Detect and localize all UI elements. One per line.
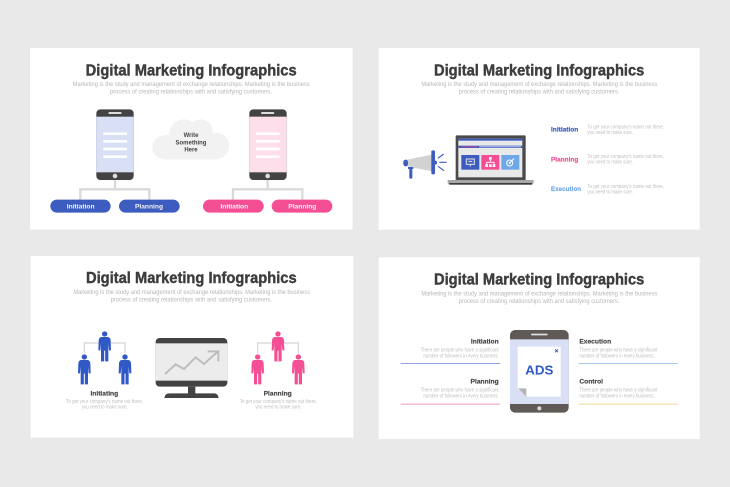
pill: pink planning: Planning — [288, 203, 316, 210]
icon: pink phone — [249, 109, 287, 180]
icon: blue team — [78, 331, 131, 384]
item: initiation — [551, 124, 664, 136]
title: Digital Marketing Infographics — [434, 62, 644, 79]
connector: blue team — [84, 343, 125, 353]
subtitle: Marketing is the study and management of exchange relationships. Marketing is the business — [421, 290, 658, 297]
subtitle: Marketing is the study and management of exchange relationships. Marketing is the business — [421, 81, 658, 88]
subtitle: process of creating relationships with and satisfying customers. — [111, 297, 272, 304]
connector: blue phone tree — [80, 180, 149, 200]
title: Digital Marketing Infographics — [434, 272, 644, 289]
subtitle: process of creating relationships with and satisfying customers. — [459, 298, 619, 305]
subtitle: Marketing is the study and management of exchange relationships. Marketing is the business — [73, 289, 311, 296]
text: initiating: To get your company's name out there, — [66, 399, 143, 405]
icon: presentation tile — [461, 155, 479, 170]
cloud callout: Here — [184, 148, 198, 154]
pill: blue planning: Planning — [135, 203, 163, 210]
panel: ads tablet — [379, 257, 700, 439]
icon: target tile — [501, 155, 519, 170]
cloud callout — [152, 119, 229, 159]
item: control — [579, 378, 678, 405]
item: initiation — [401, 339, 500, 364]
text: initiating: Initiating — [90, 390, 118, 397]
item: planning: number of followers in every business. — [423, 393, 499, 399]
item: planning — [551, 154, 664, 166]
pill: pink initiation: Initiation — [220, 203, 248, 210]
title: Digital Marketing Infographics — [86, 62, 297, 79]
icon: tablet with ads: ADS — [525, 363, 554, 378]
item: planning: you need to make sure. — [587, 160, 633, 166]
pill: pink initiation — [203, 200, 264, 213]
cloud callout: Write — [184, 133, 199, 139]
panel: phones with cloud — [30, 48, 353, 230]
item: execution: Execution — [551, 186, 581, 193]
item: execution: To get your company's name out there, — [587, 184, 664, 190]
item: planning — [401, 378, 500, 405]
item: control: number of followers in every business. — [579, 393, 655, 399]
pill: blue initiation — [50, 200, 111, 213]
item: execution: you need to make sure. — [587, 190, 633, 196]
text: initiating — [66, 390, 143, 411]
subtitle: process of creating relationships with and satisfying customers. — [459, 89, 619, 96]
item: control: There are people who have a significant — [579, 388, 658, 394]
panel: megaphone and laptop — [379, 48, 700, 230]
item: control: Control — [579, 378, 603, 385]
item: planning: To get your company's name out there, — [587, 154, 664, 160]
item: execution: Execution — [579, 339, 611, 346]
text: planning: Planning — [264, 390, 292, 397]
item: initiation: There are people who have a significant — [421, 348, 499, 354]
icon: blue phone — [96, 109, 134, 180]
icon: monitor with chart — [156, 338, 227, 398]
text: planning: To get your company's name out there, — [240, 399, 317, 405]
text: planning — [240, 390, 317, 411]
text: initiating: you need to make sure. — [82, 405, 128, 411]
subtitle — [421, 81, 658, 96]
item: execution: number of followers in every business. — [579, 354, 655, 360]
icon: laptop — [448, 135, 534, 185]
item: initiation: To get your company's name out there, — [587, 124, 664, 130]
pill: pink planning — [272, 200, 332, 213]
subtitle: Marketing is the study and management of exchange relationships. Marketing is the business — [73, 81, 310, 88]
subtitle — [73, 289, 311, 304]
icon: pink team — [251, 331, 305, 384]
icon: hierarchy tile — [481, 155, 499, 170]
item: initiation: you need to make sure. — [587, 130, 633, 136]
item: execution — [579, 339, 678, 364]
item: initiation: Initiation — [551, 127, 578, 134]
cloud callout: Something — [176, 141, 207, 147]
item: planning: There are people who have a significant — [421, 388, 499, 394]
item: initiation: Initiation — [471, 339, 499, 346]
title: Digital Marketing Infographics — [86, 270, 297, 287]
panel: people and monitor — [31, 256, 353, 438]
item: execution: There are people who have a significant — [579, 348, 658, 354]
icon: megaphone — [403, 150, 447, 179]
subtitle: process of creating relationships with and satisfying customers. — [110, 89, 272, 96]
item: planning: Planning — [471, 378, 499, 385]
icon: tablet with ads — [510, 330, 569, 413]
text: planning: you need to make sure. — [255, 405, 301, 411]
pill: blue planning — [119, 200, 180, 213]
connector: pink phone tree — [233, 180, 302, 200]
item: execution — [551, 184, 664, 196]
pill: blue initiation: Initiation — [67, 203, 95, 210]
subtitle — [73, 81, 310, 96]
item: initiation: number of followers in every business. — [423, 354, 499, 360]
subtitle — [421, 290, 658, 305]
item: planning: Planning — [551, 156, 578, 163]
connector: pink team — [258, 343, 298, 353]
